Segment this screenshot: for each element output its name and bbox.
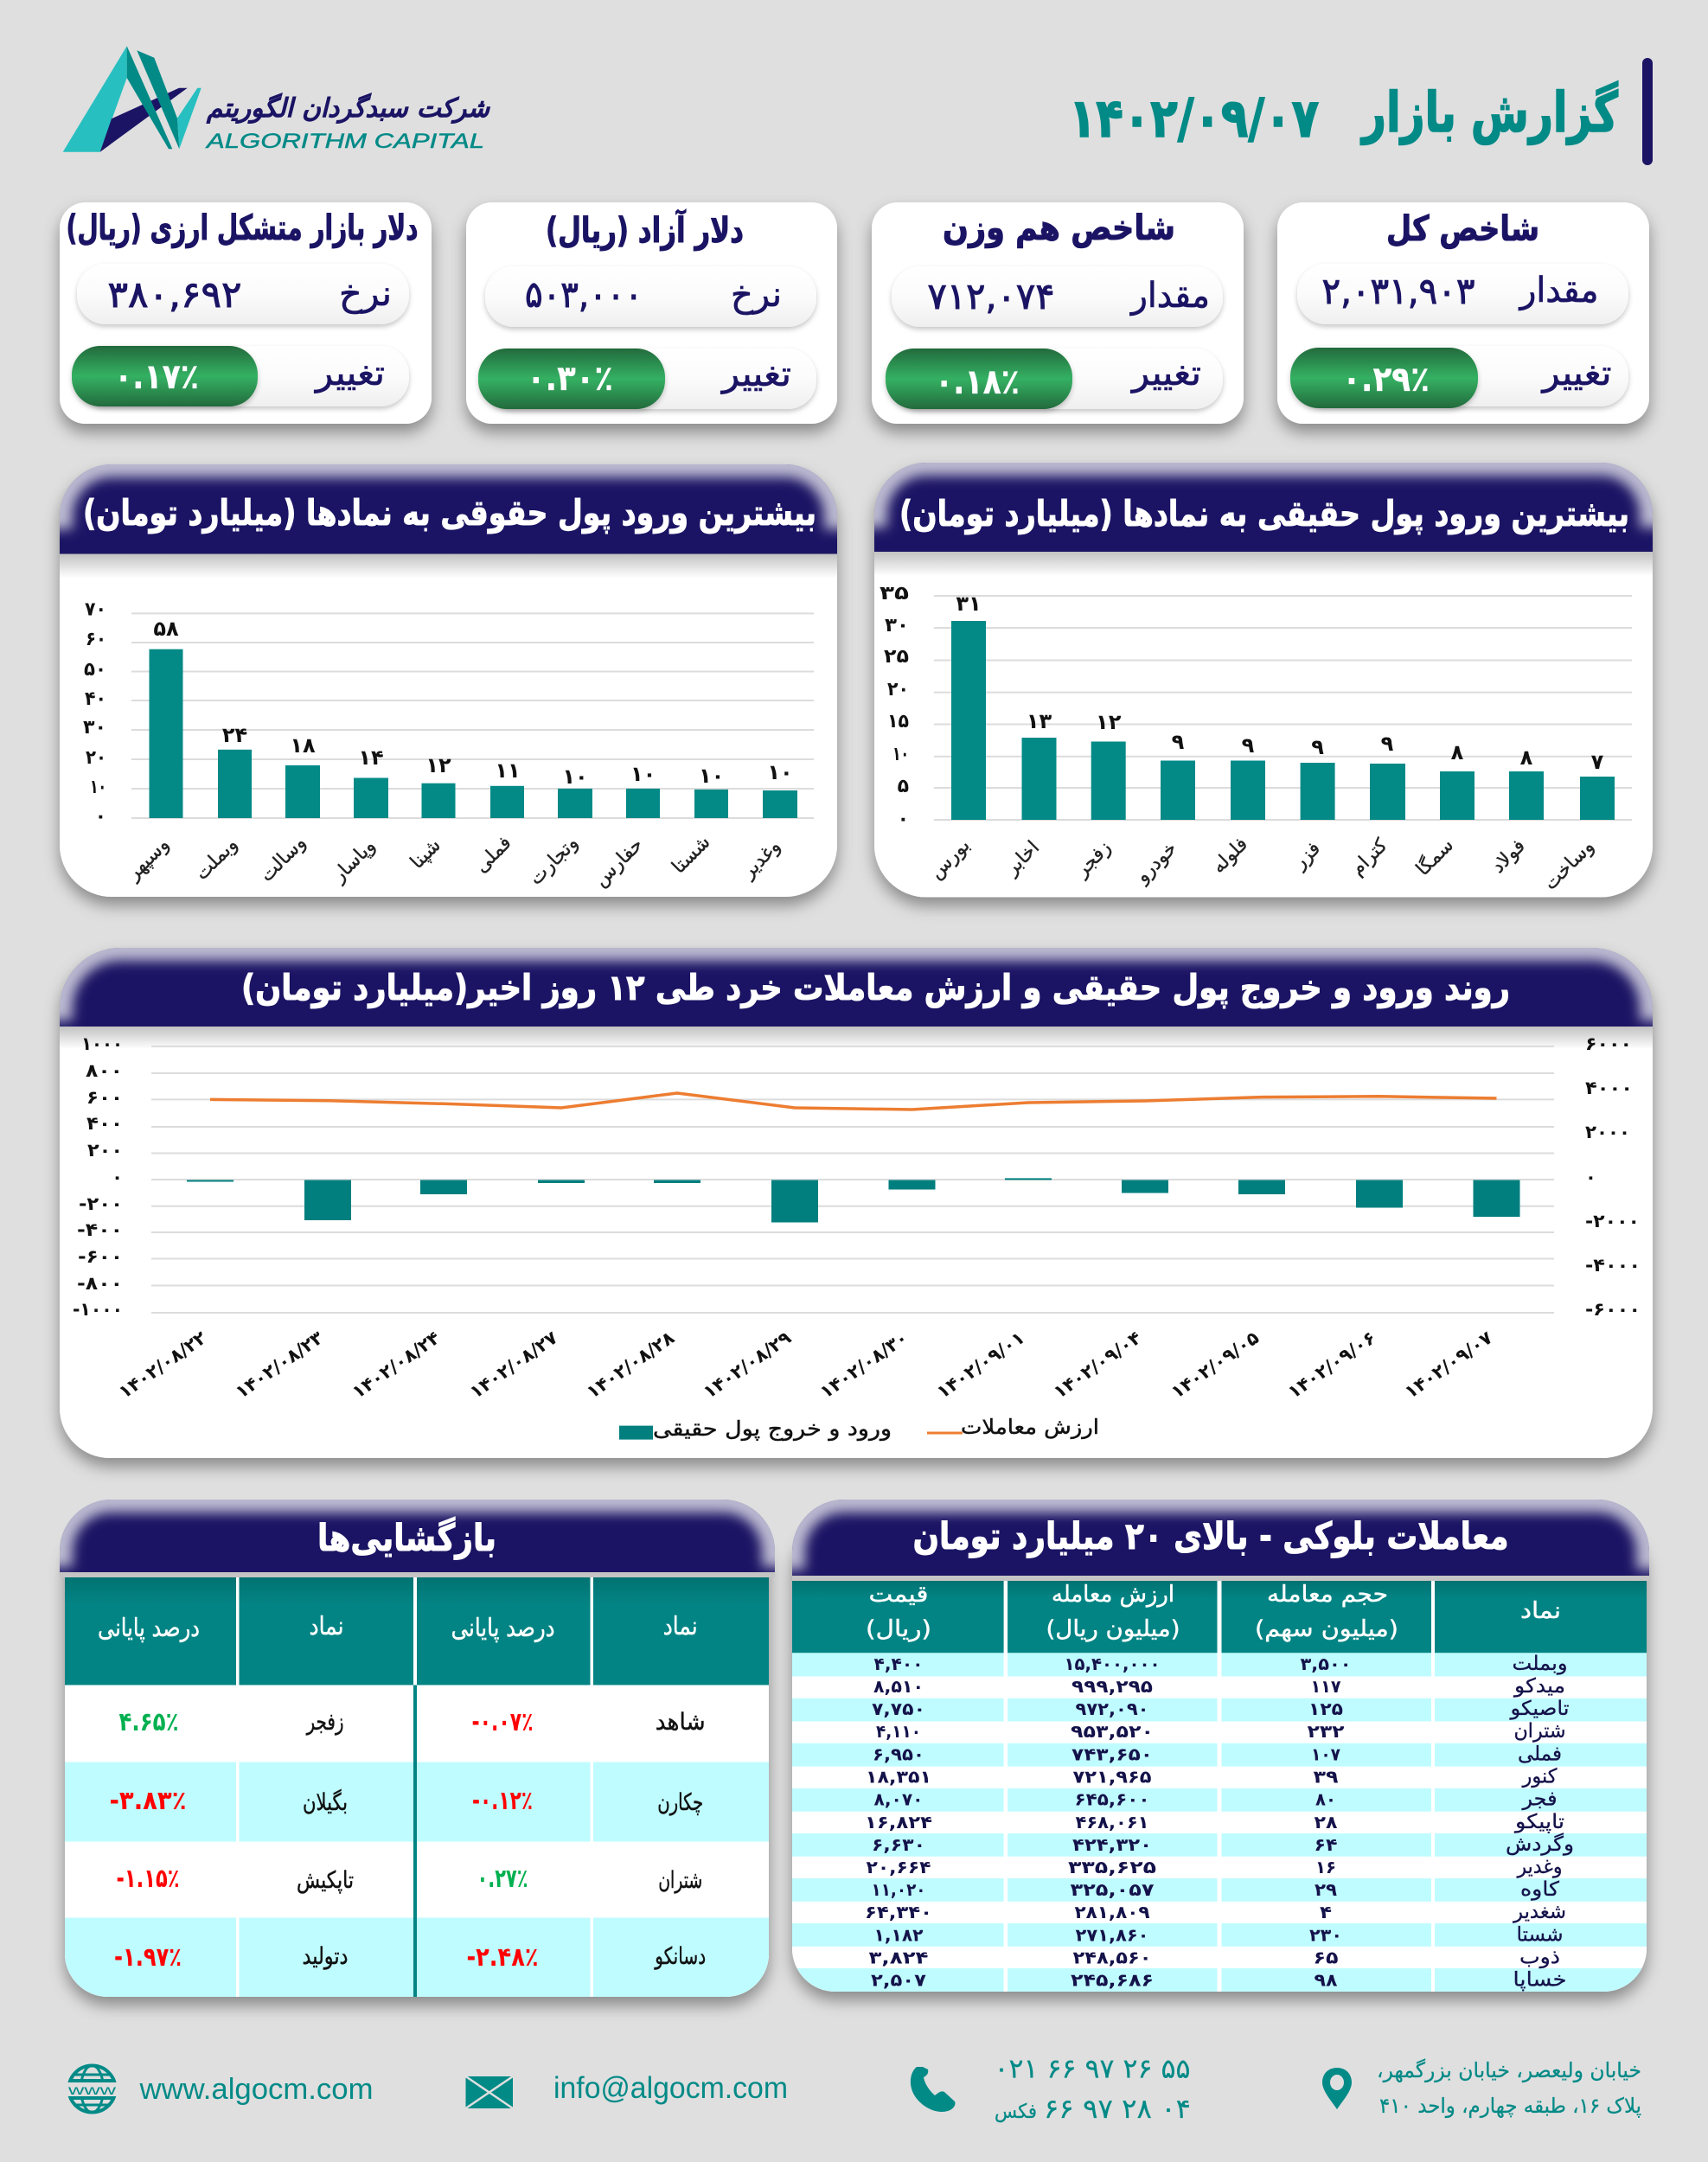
table column headers	[866, 1582, 1561, 1642]
table	[792, 1581, 1647, 1992]
trade value column: ۷۴۳,۶۵۰	[1071, 1743, 1153, 1764]
y axis labels: ۱۰	[892, 744, 909, 765]
heading: دلار آزاد (ریال)	[546, 208, 744, 251]
bars	[951, 621, 1615, 820]
change pill	[886, 349, 1223, 409]
category labels: کترام	[1347, 835, 1392, 880]
y axis labels: ۳۰	[885, 615, 909, 636]
panel: top real money inflow bar chart	[874, 463, 1653, 898]
trade value column: ۳۲۵,۰۵۷	[1071, 1879, 1154, 1900]
icon: envelope	[465, 2076, 513, 2108]
left y axis labels: ۰	[112, 1167, 123, 1187]
value labels: ۱۱	[495, 758, 521, 783]
left table percentages	[109, 1707, 187, 1973]
right y axis labels: -۶۰۰۰	[1585, 1299, 1641, 1320]
category labels: وسپهر	[122, 834, 174, 885]
symbol column: میدکو	[1513, 1675, 1565, 1698]
symbol column: فملی	[1518, 1743, 1562, 1766]
value pill: ۳۸۰,۶۹۲	[107, 273, 242, 316]
y axis labels: ۱۰	[90, 777, 106, 798]
right table symbols: شاهد	[656, 1709, 706, 1736]
logo mark	[63, 46, 202, 152]
category labels: فولاد	[1487, 835, 1530, 878]
left table symbols: بگیلان	[303, 1788, 348, 1816]
address line 2: پلاک ۱۶، طبقه چهارم، واحد ۴۱۰	[1379, 2094, 1641, 2118]
volume column: ۱۶	[1315, 1857, 1336, 1877]
y axis labels: ۲۰	[887, 679, 909, 700]
change pill: تغییر	[1130, 354, 1201, 393]
panel header	[60, 1500, 775, 1572]
change pill: ۰.۱۸٪	[935, 362, 1020, 402]
table column headers: (میلیون ریال)	[1046, 1616, 1180, 1642]
phone number: ۰۲۱ ۶۶ ۹۷ ۲۶ ۵۵	[995, 2053, 1190, 2084]
symbol column: شتران	[1513, 1720, 1565, 1743]
symbol column: وبملت	[1512, 1653, 1567, 1675]
value labels	[956, 592, 1604, 774]
panel: top legal money inflow bar chart	[60, 464, 837, 897]
symbol column: شستا	[1517, 1923, 1564, 1946]
date labels: ۱۴۰۲/۰۹/۰۱	[933, 1327, 1028, 1403]
y axis labels: ۶۰	[86, 629, 106, 650]
volume column: ۸۰	[1315, 1789, 1336, 1810]
change pill: ۰.۱۷٪	[114, 357, 199, 397]
trade value column: ۹۵۳,۵۲۰	[1071, 1721, 1154, 1742]
value pill	[1297, 264, 1628, 324]
panel heading: بازگشایی‌ها	[317, 1516, 496, 1560]
right y axis labels: ۶۰۰۰	[1585, 1033, 1632, 1054]
symbol column: وغدیر	[1517, 1856, 1562, 1878]
date labels: ۱۴۰۲/۰۹/۰۶	[1284, 1327, 1379, 1403]
y axis labels: ۲۵	[884, 646, 909, 668]
volume column: ۳,۵۰۰	[1301, 1653, 1351, 1674]
category labels: فملی	[470, 832, 516, 878]
value labels: ۸	[1520, 745, 1533, 770]
panel header	[792, 1500, 1649, 1576]
left table symbols: دتولید	[303, 1943, 348, 1970]
value labels: ۹	[1381, 732, 1394, 756]
category labels: حفارس	[590, 834, 648, 892]
date labels: ۱۴۰۲/۰۹/۰۷	[1401, 1327, 1496, 1403]
left table percentages: -۱.۹۷٪	[114, 1942, 182, 1973]
table column headers: درصد پایانی	[451, 1613, 555, 1643]
category labels: اخابر	[1001, 837, 1044, 880]
volume column: ۱۱۷	[1311, 1676, 1340, 1697]
left y axis labels: -۱۰۰۰	[73, 1299, 123, 1320]
category labels: وساخت	[1539, 835, 1598, 894]
category labels: فزر	[1289, 838, 1325, 874]
category labels	[925, 834, 1598, 894]
volume column: ۲۳۲	[1308, 1721, 1344, 1742]
panel header	[60, 948, 1653, 1027]
title: گزارش بازار	[1360, 80, 1619, 145]
right table symbols: دسانکو	[654, 1943, 706, 1970]
price column: ۸,۵۱۰	[873, 1676, 924, 1697]
report date: ۱۴۰۲/۰۹/۰۷	[1069, 86, 1319, 150]
email address: info@algocm.com	[553, 2071, 788, 2105]
footer: address	[1322, 2058, 1641, 2118]
date labels: ۱۴۰۲/۰۸/۲۹	[700, 1327, 795, 1403]
logo Latin name: ALGORITHM CAPITAL	[204, 130, 484, 153]
y axis labels: ۱۵	[887, 711, 909, 732]
value labels: ۸	[1451, 740, 1464, 764]
y axis labels: ۳۵	[880, 583, 909, 604]
legend	[619, 1415, 1099, 1441]
price column: ۲۰,۶۶۴	[867, 1857, 931, 1877]
change pill: تغییر	[720, 355, 791, 394]
value labels: ۹	[1172, 730, 1185, 754]
y axis labels: ۵	[898, 776, 909, 797]
right y axis labels: -۲۰۰۰	[1585, 1211, 1640, 1231]
trade value column: ۲۷۱,۸۶۰	[1076, 1925, 1148, 1946]
heading: شاخص کل	[1386, 209, 1539, 249]
category labels: وتجارت	[525, 832, 583, 890]
symbol column: تاپیکو	[1514, 1811, 1564, 1833]
volume column: ۲۸	[1315, 1812, 1337, 1833]
right table percentages	[467, 1707, 538, 1973]
footer: email	[465, 2071, 788, 2108]
volume column: ۳۹	[1313, 1767, 1339, 1788]
y axis labels: ۴۰	[85, 688, 106, 710]
category labels: شپنا	[406, 835, 445, 873]
date labels: ۱۴۰۲/۰۸/۲۷	[466, 1327, 561, 1403]
website address: www.algocm.com	[138, 2073, 373, 2106]
price column: ۴,۴۰۰	[873, 1653, 924, 1674]
price column: ۶۴,۳۴۰	[865, 1902, 932, 1922]
y axis labels: ۷۰	[85, 598, 106, 621]
table	[65, 1577, 769, 1998]
category labels: فلوله	[1208, 834, 1252, 878]
value pill: ۵۰۳,۰۰۰	[525, 273, 643, 316]
flow bars	[187, 1178, 1520, 1223]
title accent bar	[1642, 58, 1653, 165]
category labels: خودرو	[1131, 838, 1181, 888]
card: free dollar	[466, 202, 837, 424]
left y axis labels: -۴۰۰	[77, 1219, 123, 1240]
category labels: وپاسار	[328, 835, 380, 887]
table column headers: (میلیون سهم)	[1255, 1616, 1398, 1642]
heading: شاخص هم وزن	[943, 208, 1175, 248]
value pill: مقدار	[1129, 276, 1210, 316]
footer: phone	[911, 2053, 1191, 2125]
price column: ۶,۹۵۰	[873, 1743, 924, 1764]
right y axis labels: ۰	[1585, 1167, 1596, 1187]
category labels: شستا	[668, 831, 714, 878]
value labels: ۷	[1591, 750, 1604, 774]
legend: ارزش معاملات	[961, 1415, 1099, 1439]
right table percentages: ۰.۲۷٪	[477, 1864, 528, 1894]
trade value column: ۲۴۵,۶۸۶	[1071, 1970, 1154, 1991]
trade value line	[210, 1093, 1496, 1110]
trade value column: ۹۹۹,۲۹۵	[1071, 1676, 1153, 1697]
table column headers: (ریال)	[866, 1616, 931, 1642]
change pill	[478, 349, 816, 409]
right y axis labels: ۲۰۰۰	[1585, 1122, 1630, 1142]
y axis labels: ۲۰	[86, 747, 106, 769]
right table percentages: -۰.۰۷٪	[472, 1707, 533, 1737]
price column: ۱۸,۳۵۱	[866, 1767, 931, 1788]
left y axis labels: ۶۰۰	[86, 1087, 123, 1108]
value labels	[153, 617, 793, 789]
left table percentages: ۴.۶۵٪	[119, 1707, 178, 1737]
volume column: ۶۵	[1313, 1948, 1339, 1968]
left y axis labels	[73, 1033, 123, 1320]
value labels: ۵۸	[153, 617, 179, 641]
price column: ۳,۸۲۴	[868, 1948, 929, 1968]
logo: Algorithm Capital	[63, 46, 491, 153]
left table percentages: -۳.۸۳٪	[109, 1786, 187, 1816]
right table symbols	[654, 1709, 706, 1970]
left y axis labels: ۸۰۰	[86, 1060, 123, 1081]
y axis labels	[83, 598, 106, 828]
price column: ۴,۱۱۰	[876, 1721, 921, 1742]
value pill: ۷۱۲,۰۷۴	[927, 275, 1055, 317]
volume column: ۲۹	[1315, 1879, 1337, 1900]
date labels: ۱۴۰۲/۰۸/۲۸	[583, 1327, 678, 1403]
panel: block trades table	[792, 1500, 1649, 1992]
card: exchange market dollar	[60, 202, 432, 424]
footer: website	[66, 2065, 374, 2112]
trade value column: ۴۲۴,۳۲۰	[1072, 1834, 1152, 1855]
symbol column: کنور	[1522, 1766, 1558, 1788]
trade value column: ۱۵,۴۰۰,۰۰۰	[1064, 1653, 1161, 1674]
panel: real money flow and trade value trend chart	[60, 948, 1653, 1458]
icon: globe: www	[67, 2083, 117, 2098]
table column headers: نماد	[310, 1611, 344, 1641]
symbol column: خساپا	[1513, 1969, 1567, 1992]
address line 1: خیابان ولیعصر، خیابان بزرگمهر،	[1377, 2058, 1641, 2082]
icon: phone	[911, 2067, 956, 2112]
category labels	[122, 831, 785, 892]
date labels	[115, 1327, 1496, 1403]
value labels: ۹	[1311, 735, 1324, 759]
change pill	[72, 346, 409, 406]
left table percentages: -۱.۱۵٪	[116, 1864, 180, 1894]
table column headers: نماد	[663, 1611, 698, 1641]
right y axis labels: -۴۰۰۰	[1585, 1255, 1641, 1276]
left y axis labels: ۴۰۰	[86, 1113, 123, 1134]
category labels: وسالت	[256, 832, 310, 886]
right table symbols: شتران	[658, 1867, 702, 1894]
change pill: تغییر	[1540, 354, 1612, 393]
value labels: ۱۳	[1027, 709, 1052, 733]
right table symbols: چکارن	[657, 1789, 703, 1816]
legend: ورود و خروج پول حقیقی	[653, 1417, 892, 1441]
y axis labels: ۰	[898, 809, 909, 830]
symbol column	[1506, 1653, 1574, 1992]
change pill: تغییر	[314, 354, 385, 393]
date labels: ۱۴۰۲/۰۸/۲۲	[115, 1327, 210, 1403]
value pill: مقدار	[1519, 271, 1598, 310]
date labels: ۱۴۰۲/۰۹/۰۴	[1050, 1327, 1145, 1403]
price column: ۲,۵۰۷	[871, 1970, 926, 1991]
volume column	[1301, 1653, 1351, 1991]
value labels: ۱۰	[562, 764, 588, 789]
y axis labels	[880, 583, 909, 830]
value labels: ۱۴	[358, 745, 384, 770]
left table symbols: تاپکیش	[297, 1867, 354, 1894]
card: equal weight index	[872, 202, 1244, 424]
left y axis labels: -۲۰۰	[79, 1193, 123, 1214]
category labels: وغدیر	[737, 835, 785, 883]
value labels: ۱۰	[767, 760, 793, 784]
change pill: ۰.۳۰٪	[527, 359, 613, 399]
trade value column: ۲۸۱,۸۰۹	[1074, 1902, 1150, 1922]
price column: ۱,۱۸۲	[873, 1925, 924, 1946]
panel header	[874, 463, 1653, 552]
volume column: ۱۰۷	[1311, 1743, 1340, 1764]
symbol column: ذوب	[1519, 1947, 1560, 1969]
left y axis labels: -۶۰۰	[78, 1246, 123, 1267]
volume column: ۹۸	[1315, 1970, 1337, 1991]
value labels: ۳۱	[956, 592, 982, 616]
date labels: ۱۴۰۲/۰۸/۲۴	[349, 1327, 444, 1403]
y axis labels: ۰	[95, 806, 106, 828]
left y axis labels: ۱۰۰۰	[81, 1033, 123, 1054]
trade value column: ۲۴۸,۵۶۰	[1072, 1948, 1152, 1968]
icon: globe	[66, 2065, 118, 2112]
price column: ۷,۷۵۰	[872, 1698, 925, 1719]
bars	[149, 649, 797, 818]
table column headers: نماد	[1520, 1598, 1561, 1624]
symbol column: شغدیر	[1513, 1901, 1566, 1923]
value labels: ۱۰	[699, 764, 724, 788]
left table symbols: زفجر	[305, 1709, 344, 1736]
trade value column: ۴۶۸,۰۶۱	[1076, 1812, 1148, 1833]
value pill	[77, 264, 409, 324]
price column	[865, 1653, 932, 1991]
price column: ۱۶,۸۲۴	[865, 1812, 932, 1833]
value labels: ۹	[1242, 733, 1255, 758]
logo Persian name: شرکت سبدگردان الگوریتم	[206, 93, 491, 124]
date labels: ۱۴۰۲/۰۸/۲۳	[232, 1327, 327, 1403]
price column: ۱۱,۰۲۰	[872, 1879, 925, 1900]
value pill: نرخ	[339, 274, 392, 314]
icon: location pin	[1322, 2068, 1352, 2109]
panel header	[60, 464, 837, 553]
price column: ۸,۰۷۰	[873, 1789, 924, 1810]
change pill	[1290, 346, 1628, 408]
category labels: وبملت	[191, 834, 242, 885]
symbol column: کاوه	[1520, 1878, 1559, 1901]
right table percentages: -۰.۱۲٪	[472, 1786, 533, 1816]
volume column: ۲۳۰	[1309, 1925, 1342, 1946]
right y axis labels	[1585, 1033, 1641, 1320]
table column headers	[98, 1611, 698, 1643]
volume column: ۶۴	[1315, 1834, 1337, 1855]
symbol column: فجر	[1521, 1788, 1557, 1811]
value pill: نرخ	[731, 275, 782, 315]
value pill	[892, 266, 1223, 327]
symbol column: تاصیکو	[1509, 1698, 1569, 1720]
price column: ۶,۶۳۰	[872, 1834, 925, 1855]
y axis labels: ۳۰	[83, 717, 106, 739]
value labels: ۱۰	[630, 762, 656, 786]
trade value column: ۶۴۵,۶۰۰	[1074, 1789, 1150, 1810]
panel heading: روند ورود و خروج پول حقیقی و ارزش معاملات خرد طی ۱۲ روز اخیر(میلیارد تومان)	[241, 967, 1510, 1009]
value labels: ۱۲	[1096, 710, 1122, 734]
trade value column: ۷۲۱,۹۶۵	[1072, 1767, 1152, 1788]
volume column: ۴	[1320, 1902, 1332, 1922]
category labels: بورس	[925, 835, 975, 884]
right table percentages: -۲.۴۸٪	[467, 1942, 538, 1973]
heading: دلار بازار متشکل ارزی (ریال)	[66, 208, 419, 248]
date labels: ۱۴۰۲/۰۸/۳۰	[816, 1327, 912, 1403]
panel heading: بیشترین ورود پول حقوقی به نمادها (میلیارد تومان)	[83, 492, 816, 534]
left table symbols	[297, 1709, 354, 1970]
table column headers: قیمت	[868, 1582, 929, 1608]
category labels: زفجر	[1071, 837, 1116, 882]
value labels: ۱۸	[290, 733, 316, 758]
fax label: فکس	[995, 2101, 1037, 2123]
left y axis labels: -۸۰۰	[77, 1273, 123, 1294]
date labels: ۱۴۰۲/۰۹/۰۵	[1167, 1327, 1263, 1403]
table column headers: حجم معامله	[1267, 1582, 1388, 1608]
trade value column: ۹۷۲,۰۹۰	[1076, 1698, 1148, 1719]
value labels: ۱۲	[425, 753, 451, 777]
table column headers: درصد پایانی	[98, 1613, 200, 1643]
trade value column: ۳۳۵,۶۲۵	[1068, 1857, 1156, 1877]
y axis labels: ۵۰	[84, 659, 106, 681]
card: total index	[1277, 202, 1649, 424]
category labels: سمگا	[1411, 834, 1458, 880]
change pill: ۰.۲۹٪	[1342, 360, 1430, 400]
trade value column	[1064, 1653, 1161, 1991]
value pill: ۲,۰۳۱,۹۰۳	[1321, 270, 1475, 312]
table column headers: ارزش معامله	[1052, 1582, 1174, 1608]
left y axis labels: ۲۰۰	[87, 1140, 123, 1161]
symbol column: وگردش	[1506, 1833, 1574, 1856]
right y axis labels: ۴۰۰۰	[1585, 1078, 1633, 1098]
value pill	[485, 266, 816, 327]
panel: market opening returns table	[60, 1500, 775, 1998]
fax number: ۶۶ ۹۷ ۲۸ ۰۴	[1044, 2094, 1191, 2125]
panel heading: معاملات بلوکی - بالای ۲۰ میلیارد تومان	[913, 1515, 1508, 1558]
volume column: ۱۲۵	[1308, 1698, 1343, 1719]
value labels: ۲۴	[222, 723, 247, 747]
